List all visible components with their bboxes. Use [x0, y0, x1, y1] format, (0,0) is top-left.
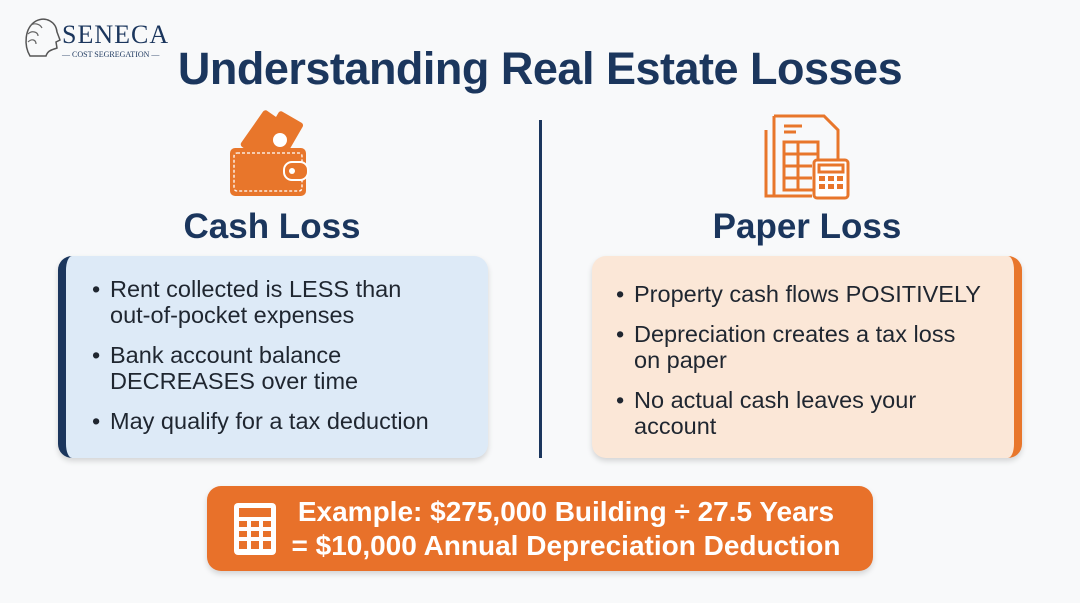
panel: paper loss: Property cash flows POSITIVELY — [634, 281, 981, 307]
panel: paper loss — [592, 256, 1022, 458]
heading: cash loss: Cash Loss — [184, 207, 360, 246]
icon: paper and calculator — [764, 114, 850, 200]
title: Understanding Real Estate Losses — [178, 43, 902, 94]
panel: cash loss: Bank account balance — [110, 342, 341, 368]
icon: wallet — [230, 110, 307, 196]
logo: — COST SEGREGATION — — [62, 50, 159, 59]
heading: paper loss: Paper Loss — [713, 207, 901, 246]
panel: cash loss — [58, 256, 488, 458]
example text: = $10,000 Annual Depreciation Deduction — [291, 530, 840, 561]
panel: paper loss: on paper — [634, 347, 727, 373]
panel: paper loss: No actual cash leaves your — [634, 387, 916, 413]
example text — [291, 496, 840, 561]
logo — [25, 18, 169, 59]
example text: Example: $275,000 Building ÷ 27.5 Years — [298, 496, 834, 527]
panel: paper loss: Depreciation creates a tax loss — [634, 321, 955, 347]
callout: example — [207, 486, 873, 571]
divider — [539, 120, 542, 458]
logo: SENECA — [62, 20, 169, 49]
icon: calculator — [234, 503, 276, 555]
panel: cash loss: May qualify for a tax deduction — [110, 408, 429, 434]
panel: paper loss: account — [634, 413, 716, 439]
panel: cash loss: DECREASES over time — [110, 368, 358, 394]
panel: cash loss: out-of-pocket expenses — [110, 302, 354, 328]
panel: cash loss: Rent collected is LESS than — [110, 276, 401, 302]
